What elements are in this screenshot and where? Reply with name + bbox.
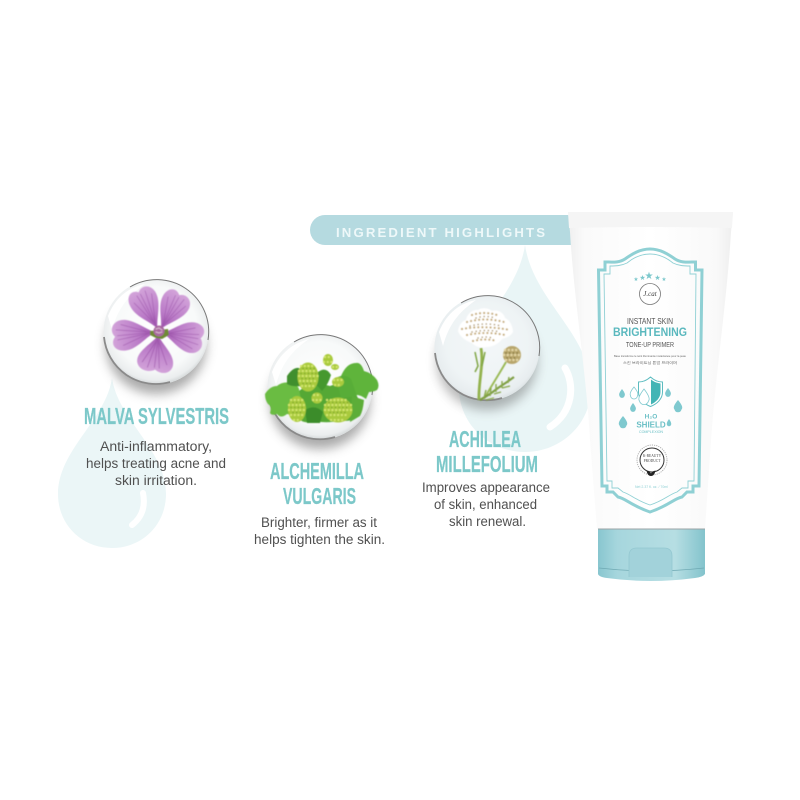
product name: 스킨 브라이트닝 톤업 프라이머 bbox=[623, 360, 677, 365]
net weight: Net 2.37 fl. oz. / 70ml bbox=[635, 485, 668, 489]
tube crimp bbox=[568, 212, 733, 228]
bubble: alchemilla plant bbox=[265, 334, 378, 449]
quality seal bbox=[637, 445, 667, 476]
icon: shield bbox=[638, 377, 662, 406]
ingredient: achillea millefolium bbox=[422, 296, 550, 529]
heading: alchemilla vulgaris: VULGARIS bbox=[283, 483, 356, 509]
ingredient: malva sylvestris bbox=[84, 280, 229, 488]
bubble: yarrow plant bbox=[434, 296, 540, 410]
description: malva sylvestris: skin irritation. bbox=[115, 473, 197, 488]
icon: five stars: ★ bbox=[634, 277, 639, 283]
water drop: right bbox=[459, 245, 591, 452]
description: alchemilla vulgaris: Brighter, firmer as it bbox=[261, 515, 377, 530]
product name: BRIGHTENING bbox=[613, 325, 687, 339]
description: malva sylvestris: Anti-inflammatory, bbox=[100, 439, 212, 454]
description: malva sylvestris bbox=[86, 439, 226, 488]
product name: TONE-UP PRIMER bbox=[626, 342, 674, 349]
icon: five stars: ★ bbox=[645, 271, 654, 282]
heading: alchemilla vulgaris bbox=[270, 458, 364, 509]
brand logo bbox=[640, 284, 660, 304]
ingredient highlights banner bbox=[310, 215, 580, 245]
heading: achillea millefolium: ACHILLEA bbox=[449, 426, 521, 452]
brand logo: J.cat bbox=[643, 290, 658, 298]
description: alchemilla vulgaris bbox=[254, 515, 385, 547]
icon: five stars: ★ bbox=[639, 274, 646, 282]
product name: Base transforme le teint illuminante instantanée pour la peau bbox=[614, 354, 686, 358]
tube cap bbox=[598, 529, 705, 581]
quality seal: PRODUCT bbox=[644, 459, 661, 463]
quality seal: K-BEAUTY bbox=[643, 454, 662, 458]
water drop: left bbox=[58, 378, 166, 548]
heading: alchemilla vulgaris: ALCHEMILLA bbox=[270, 458, 364, 484]
icon: yarrow flower bbox=[458, 308, 521, 400]
H2O shield text: COMPLEXION bbox=[639, 430, 663, 434]
heading: achillea millefolium: MILLEFOLIUM bbox=[436, 451, 538, 477]
icon: green leaves and flowers bbox=[265, 354, 378, 423]
product name bbox=[613, 317, 687, 365]
H2O shield text: SHIELD bbox=[636, 420, 666, 430]
bubble: malva flower bbox=[104, 280, 209, 394]
tube body bbox=[568, 212, 733, 529]
description: achillea millefolium bbox=[422, 480, 550, 529]
description: achillea millefolium: Improves appearance bbox=[422, 480, 550, 495]
ingredient: alchemilla vulgaris bbox=[254, 334, 385, 547]
icon: purple flower bbox=[111, 283, 206, 375]
label frame bbox=[598, 249, 702, 512]
ingredient highlights banner: INGREDIENT HIGHLIGHTS bbox=[336, 225, 545, 240]
product tube bbox=[568, 212, 733, 581]
H2O shield text: H₂O bbox=[645, 414, 657, 420]
H2O shield text bbox=[636, 414, 666, 434]
icon: five stars: ★ bbox=[662, 277, 667, 283]
product name: INSTANT SKIN bbox=[627, 317, 673, 326]
heading: malva sylvestris: MALVA SYLVESTRIS bbox=[84, 403, 229, 429]
heading: achillea millefolium bbox=[436, 426, 538, 477]
icon: five stars: ★ bbox=[654, 274, 661, 282]
icon: water droplets bbox=[619, 387, 682, 428]
description: malva sylvestris: helps treating acne and bbox=[86, 456, 226, 471]
description: alchemilla vulgaris: helps tighten the skin. bbox=[254, 532, 385, 547]
description: achillea millefolium: skin renewal. bbox=[449, 514, 526, 529]
icon: five stars bbox=[634, 271, 667, 283]
flower clusters bbox=[288, 354, 352, 422]
description: achillea millefolium: of skin, enhanced bbox=[434, 497, 537, 512]
